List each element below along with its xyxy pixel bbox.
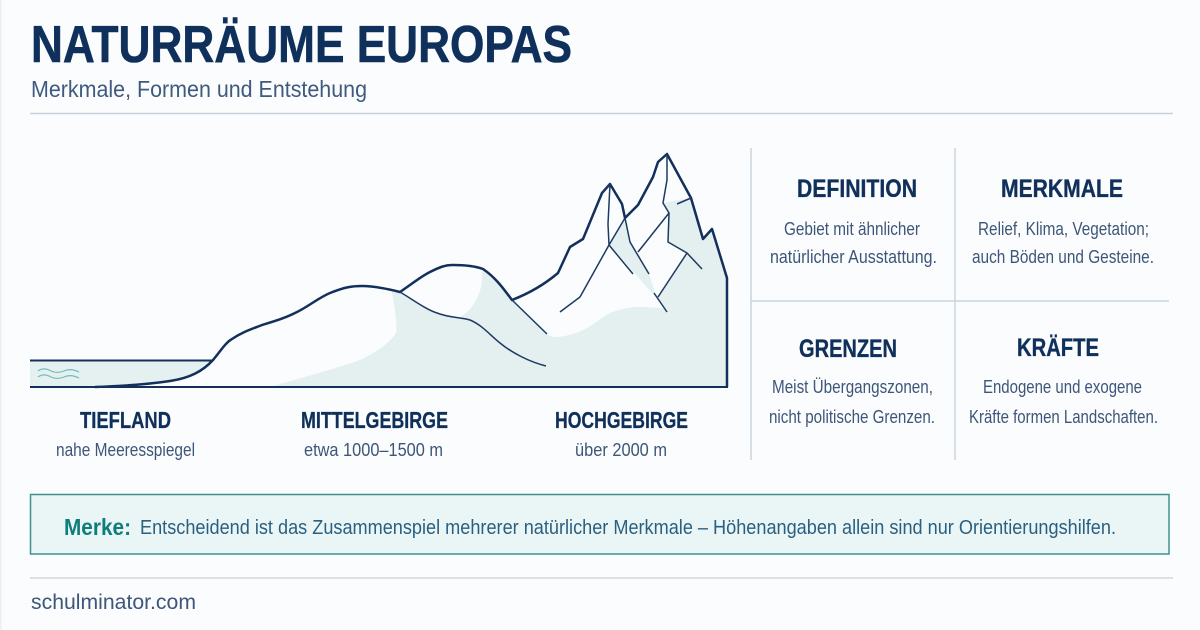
label: Hochgebirge [555,407,688,460]
label: Mittelgebirge: MITTELGEBIRGE [301,407,448,433]
label: Hochgebirge: über 2000 m [575,440,667,460]
title: NATURRÄUME EUROPAS [31,16,572,74]
footer: source: schulminator.com [31,591,196,614]
panel: Kräfte: Endogene und exogene [983,377,1142,397]
water area [30,360,213,387]
ground line [30,386,728,388]
callout: Merke: Merke: [64,514,131,540]
terrain outline [95,154,727,387]
panel: Grenzen: GRENZEN [799,335,897,363]
panel: Grenzen: nicht politische Grenzen. [769,407,935,427]
label: Mittelgebirge: etwa 1000–1500 m [304,440,443,460]
panel: Definition: DEFINITION [797,175,917,203]
panel: Kräfte: Kräfte formen Landschaften. [969,407,1158,427]
label: Tiefland [56,407,195,460]
chart: landscape profile [30,154,728,387]
panel: Definition: natürlicher Ausstattung. [770,247,937,267]
panel: Merkmale: auch Böden und Gesteine. [972,247,1154,267]
label: Hochgebirge: HOCHGEBIRGE [555,407,688,433]
panel: Merkmale: Relief, Klima, Vegetation; [978,219,1149,239]
panel: Grenzen [769,335,935,427]
water waves [38,369,79,378]
label: Tiefland: nahe Meeresspiegel [56,440,195,460]
hill contour lines [400,292,547,366]
mountain ridge lines [560,154,702,312]
label: Tiefland: TIEFLAND [80,407,171,433]
panel: Merkmale [972,175,1154,267]
panel: Merkmale: MERKMALE [1001,175,1123,203]
label: Mittelgebirge [301,407,448,460]
panel: Grenzen: Meist Übergangszonen, [772,377,933,397]
callout: Merke [30,494,1169,554]
water top line [30,360,213,362]
panel: Kräfte [969,334,1158,427]
shaded terrain [270,198,727,387]
subtitle: Merkmale, Formen und Entstehung [31,76,367,102]
panel: Definition [770,175,937,267]
panel: Definition: Gebiet mit ähnlicher [784,219,920,239]
panel: Kräfte: KRÄFTE [1017,334,1099,362]
callout: Merke: Entscheidend ist das Zusammenspiel mehrerer natürlicher Merkmale – Höhenangaben allein sind nur Orientierungshilfen. [140,517,1116,539]
